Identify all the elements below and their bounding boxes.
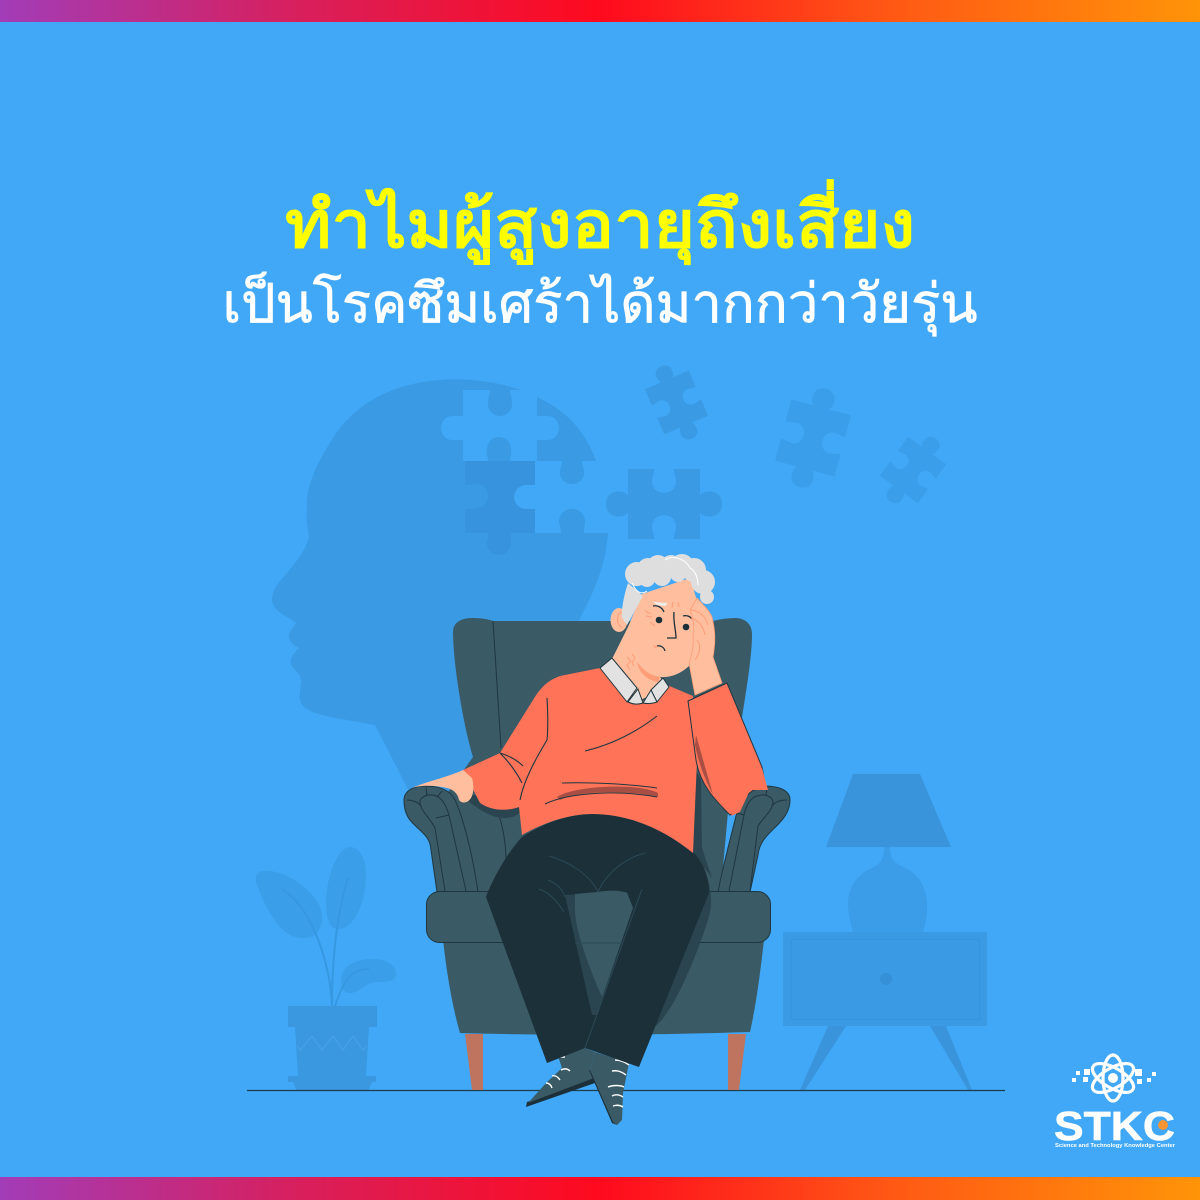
side table and lamp — [783, 774, 987, 1090]
atom icon — [1088, 1055, 1138, 1101]
STKC logo — [1054, 1055, 1176, 1149]
eyes — [656, 617, 662, 623]
chair back — [448, 618, 752, 900]
raised sleeve — [688, 683, 768, 816]
puzzle piece large — [606, 469, 722, 539]
potted plant — [256, 847, 396, 1091]
plant leaves — [256, 871, 322, 938]
sweater — [463, 668, 697, 853]
puzzle piece top — [639, 357, 714, 448]
top gradient bar — [0, 0, 1200, 22]
plant stems — [282, 878, 369, 1006]
lampshade — [826, 774, 951, 847]
left armrest — [404, 786, 506, 892]
logo orange dot — [1158, 1120, 1168, 1130]
logo tagline: Science and Technology Knowledge Center — [1055, 1143, 1176, 1149]
neck wrinkles — [627, 602, 679, 670]
lamp base — [848, 847, 927, 932]
neck and face — [600, 578, 703, 700]
elderly man — [412, 554, 768, 1125]
left shoe — [526, 1048, 595, 1107]
collar — [600, 658, 669, 704]
title line 2: เป็นโรคซึมเศร้าได้มากกว่าวัยรุ่น — [222, 272, 978, 337]
logo wordmark: STKC — [1054, 1103, 1175, 1149]
puzzle gap 1 — [441, 390, 559, 461]
drawer knob — [880, 973, 892, 985]
title — [222, 179, 978, 337]
table legs — [800, 1026, 972, 1090]
title line 1: ทำไมผู้สูงอายุถึงเสี่ยง — [285, 179, 915, 266]
puzzle piece far right — [871, 425, 955, 515]
puzzle piece in head — [465, 461, 535, 555]
plant pot — [288, 1006, 377, 1091]
seat cushion — [426, 892, 770, 942]
trousers — [486, 814, 709, 1067]
bottom gradient bar — [0, 1177, 1200, 1200]
left hand — [412, 770, 473, 802]
hand on forehead — [689, 598, 722, 695]
floor line — [247, 1090, 1005, 1092]
right shoe — [589, 1052, 629, 1125]
sweater folds — [500, 698, 657, 800]
armchair — [404, 618, 790, 1090]
face — [600, 578, 703, 700]
logo pixel squares — [1072, 1069, 1156, 1084]
chair shadow under legs — [620, 765, 712, 1036]
sleeve shadow — [695, 735, 713, 795]
shadow under left arm — [460, 795, 520, 818]
right armrest — [718, 786, 790, 892]
puzzle piece right — [770, 381, 856, 495]
brows, nose and mouth — [653, 606, 692, 651]
grey curly hair — [625, 554, 715, 604]
ear — [610, 608, 628, 632]
table top and drawer — [783, 932, 987, 1026]
chair base — [443, 940, 764, 1035]
chair legs — [465, 1034, 746, 1090]
floating puzzle pieces — [606, 357, 955, 539]
grey side hair — [622, 583, 643, 625]
puzzle gap 2 — [514, 461, 612, 533]
belly shadow — [557, 787, 658, 800]
head silhouette with puzzle gaps — [272, 379, 612, 797]
finger lines — [690, 610, 708, 660]
chin shadow — [637, 662, 660, 682]
